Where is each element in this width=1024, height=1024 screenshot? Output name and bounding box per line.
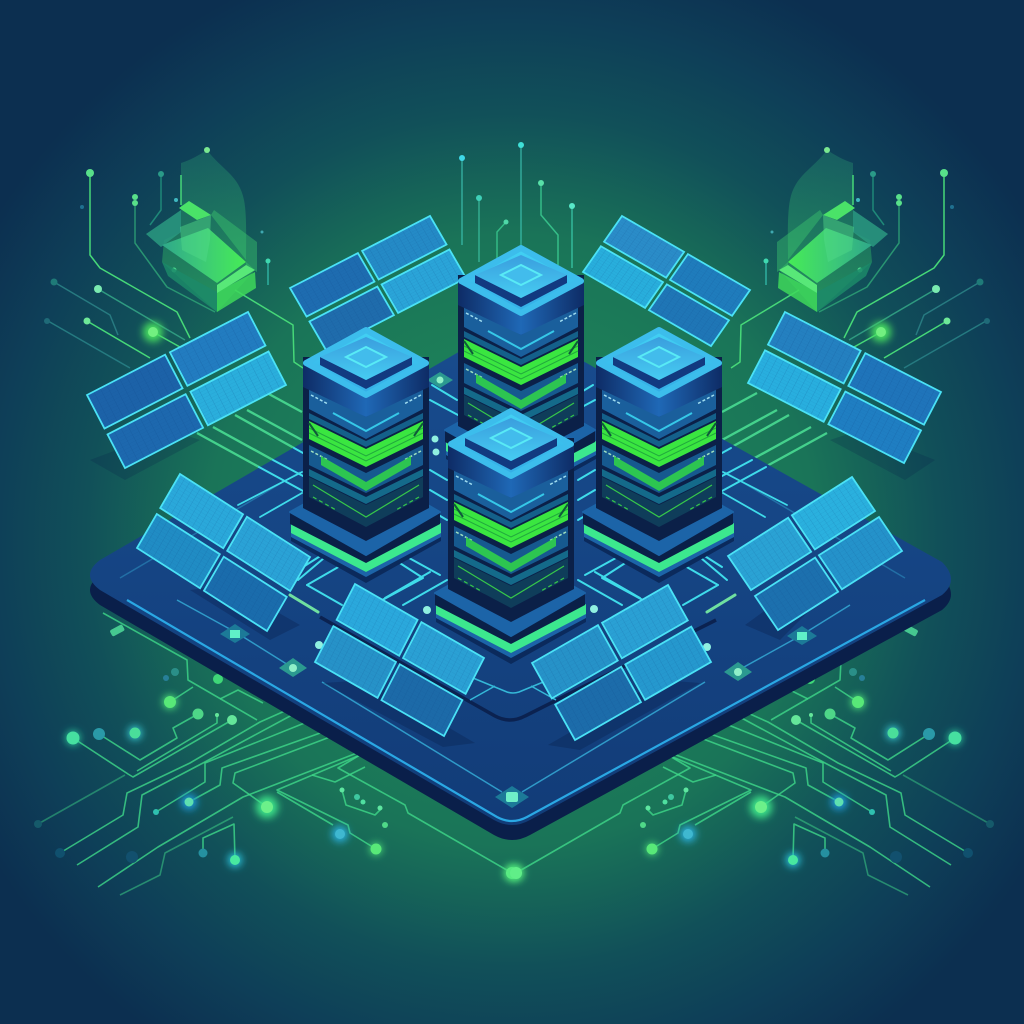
circuit traces: bottom right bbox=[508, 613, 994, 895]
solar panel: front left bbox=[315, 584, 484, 736]
server tower: left bbox=[290, 330, 441, 583]
platform side bbox=[90, 340, 951, 840]
platform top bbox=[90, 325, 951, 825]
platform centre trace bbox=[470, 678, 556, 700]
circuit traces: top right bbox=[731, 169, 990, 368]
circuit traces: top centre bbox=[459, 142, 575, 268]
solar panel: front right bbox=[532, 585, 711, 740]
circuit traces: bottom left bbox=[34, 613, 520, 895]
platform nodes bbox=[220, 372, 817, 808]
solar panel: back left bbox=[290, 216, 466, 350]
platform traces: right half bbox=[567, 385, 787, 612]
platform groove bbox=[320, 617, 716, 720]
server tower: front bbox=[435, 411, 586, 664]
solar panel: lower right bbox=[728, 477, 902, 630]
platform inset lines bbox=[120, 472, 905, 792]
solar panel: back right bbox=[583, 216, 750, 346]
circuit traces: top left bbox=[44, 169, 303, 368]
green feeder lines: right bbox=[722, 393, 827, 467]
platform traces: left half bbox=[238, 385, 458, 612]
guard icon: left bbox=[146, 147, 257, 312]
green feeder lines: left bbox=[197, 393, 302, 467]
solar panel: upper right bbox=[748, 312, 941, 463]
guard icon: right bbox=[777, 147, 888, 312]
server tower: back bbox=[445, 248, 596, 501]
platform rim highlight bbox=[127, 600, 925, 821]
server tower: right bbox=[583, 330, 734, 583]
solar panel: lower left bbox=[137, 474, 310, 631]
panel shadows bbox=[90, 430, 935, 750]
platform bbox=[90, 325, 951, 840]
solar panel: upper left bbox=[87, 312, 286, 468]
